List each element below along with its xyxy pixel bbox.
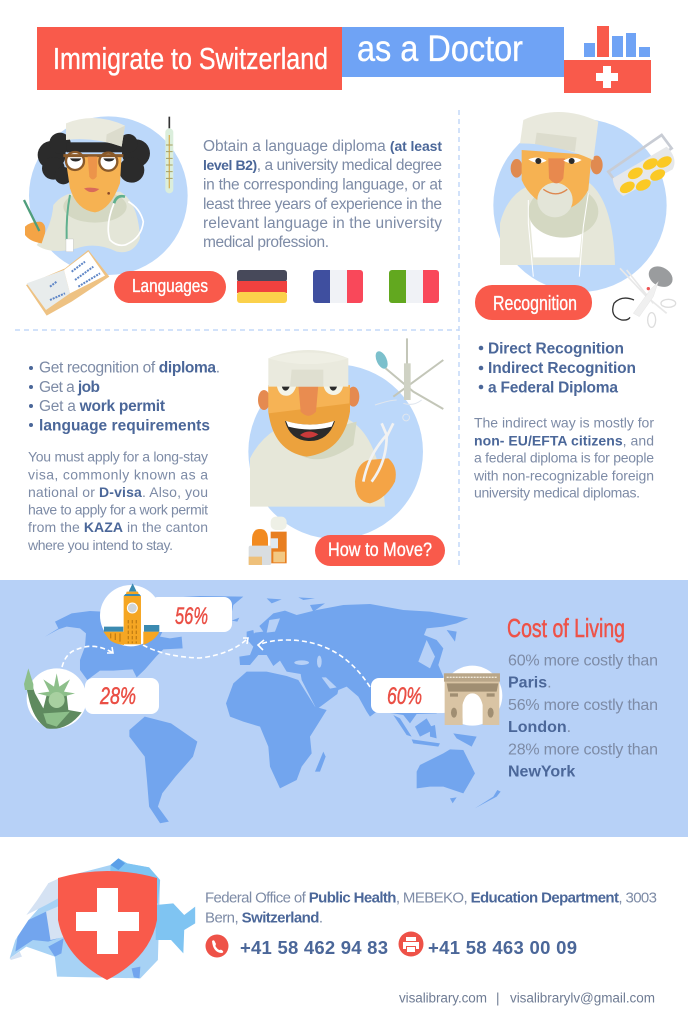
text: website and email [399, 990, 655, 1006]
callout: 56 percent: 56% [175, 603, 208, 630]
text: visa: visa, commonly known as a [28, 466, 208, 482]
text: cost comparison: 56% more costly than [508, 697, 658, 714]
text: language requirements: least three years of experience in the [203, 196, 442, 213]
surgical lamp [608, 135, 672, 185]
text: visa: You must apply for a long-stay [28, 448, 208, 464]
text: cost comparison: NewYork [508, 764, 575, 780]
text: language requirements: level B2), a university medical degree [203, 157, 442, 174]
text: address: Federal Office of Public Health, MEBEKO, Education Department, 3003 [205, 890, 657, 906]
icon: chart with swiss cross [564, 26, 651, 93]
surgical instrument [645, 262, 676, 291]
list: steps: language requirements [39, 418, 210, 434]
text: phone number: +41 58 462 94 83 [240, 937, 388, 958]
list: steps [29, 360, 220, 434]
icon: statue of liberty [24, 668, 87, 729]
flag: italy [389, 270, 439, 303]
text: language requirements: medical profession. [203, 234, 329, 251]
flag: france [313, 270, 363, 303]
icon: swiss shield [58, 871, 157, 980]
text: language requirements [203, 138, 443, 251]
text: cost comparison: 28% more costly than [508, 742, 658, 758]
text: indirect way: non- EU/EFTA citizens, and [474, 432, 654, 448]
text: website and email: | [496, 990, 500, 1006]
text: cost comparison: London. [508, 719, 571, 736]
panel: how to move [27, 338, 445, 566]
pliers in hand [355, 458, 396, 503]
callout: 28 percent [24, 668, 159, 729]
text: cost comparison [508, 652, 658, 780]
list: recognition routes [479, 340, 636, 396]
panel: cost of living map [0, 580, 688, 837]
button: recognition: Recognition [493, 293, 577, 315]
route arrows [62, 638, 370, 687]
panel: languages [24, 116, 443, 316]
list: steps: Get a job [39, 379, 100, 396]
list: recognition routes: Direct Recognition [488, 340, 624, 358]
text: indirect way: university medical diplomas. [474, 484, 640, 500]
text: indirect way: The indirect way is mostly for [474, 414, 654, 430]
icon: fax [398, 932, 424, 956]
dashed dividers [15, 110, 459, 568]
thermometer [167, 117, 172, 128]
flag: germany [237, 270, 287, 303]
button: how to move: How to Move? [328, 540, 432, 561]
text: address: Bern, Switzerland. [205, 910, 323, 926]
icon: arc de triomphe [442, 666, 502, 726]
button: languages: Languages [132, 276, 208, 296]
text: fax number: +41 58 463 00 09 [428, 937, 577, 958]
text: visa: have to apply for a work permit [28, 502, 208, 518]
text: indirect way [473, 414, 654, 500]
text: visa: from the KAZA in the canton [28, 519, 208, 535]
list: recognition routes: Indirect Recognition [488, 360, 636, 377]
callout: 56 percent [100, 583, 232, 646]
world map [45, 596, 501, 823]
title banner [37, 27, 564, 90]
text: cost comparison: Paris. [508, 674, 552, 692]
button: recognition [475, 285, 592, 320]
illustration: old doctor [493, 112, 676, 327]
panel: contact footer [10, 858, 657, 1006]
text: address [205, 890, 657, 926]
text: visa: where you intend to stay. [27, 537, 173, 553]
heading: cost of living: Cost of Living [507, 613, 625, 643]
button: how to move [315, 535, 445, 566]
text: visa: national or D-visa. Also, you [28, 484, 208, 500]
text: indirect way: with non-recognizable foreign [473, 468, 654, 484]
icon: big ben [100, 583, 161, 646]
text: indirect way: a federal diploma is for people [474, 450, 654, 466]
list: steps: Get recognition of diploma. [39, 360, 220, 376]
text: language requirements: relevant language in the university [203, 215, 442, 232]
pill bottles [271, 532, 287, 563]
text: language requirements: Obtain a language diploma (at least [203, 138, 442, 155]
text: website and email: visalibrarylv@gmail.com [510, 990, 655, 1006]
title banner: as a Doctor [357, 28, 523, 69]
list: steps: Get a work permit [39, 398, 165, 415]
icon: phone [206, 934, 228, 958]
swiss map [10, 858, 195, 978]
text: cost comparison: 60% more costly than [508, 652, 658, 670]
callout: 60 percent: 60% [387, 683, 422, 710]
text: website and email: visalibrary.com [399, 990, 487, 1006]
dental tools [373, 349, 390, 371]
book [26, 250, 109, 316]
text: language requirements: in the corresponding language, or at [203, 176, 443, 194]
illustration: smiling doctor [248, 338, 443, 565]
list: recognition routes: a Federal Diploma [488, 380, 618, 396]
callout: 28 percent: 28% [99, 683, 136, 710]
title banner: Immigrate to Switzerland [53, 41, 328, 76]
text: visa [27, 448, 208, 553]
panel: recognition [473, 112, 676, 500]
callout: 60 percent [371, 666, 502, 726]
button: languages [114, 271, 226, 303]
illustration: female doctor [24, 116, 188, 316]
